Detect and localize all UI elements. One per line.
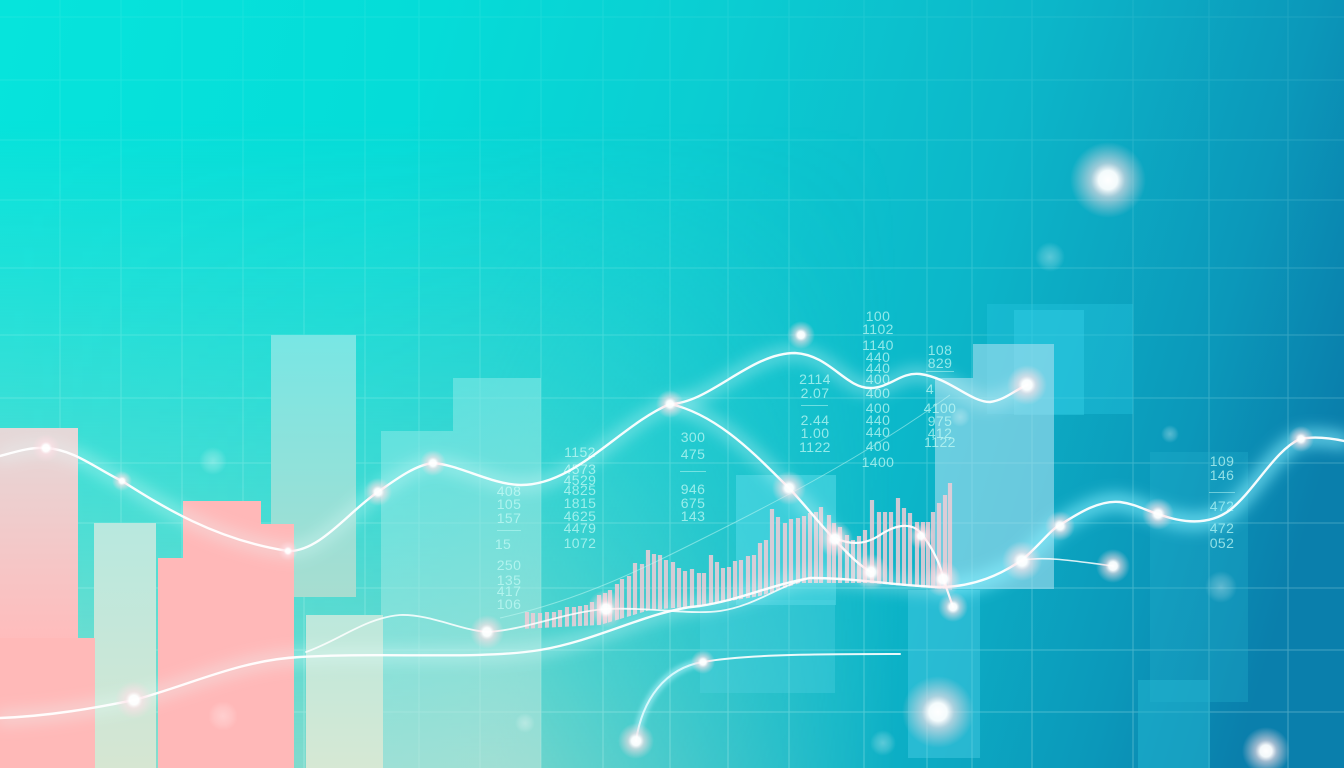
bar: blue bottom right bbox=[1138, 680, 1210, 768]
numbers column 1: 250 bbox=[497, 557, 521, 573]
thin diagonal trend line bbox=[500, 395, 950, 618]
numbers column 6 bbox=[924, 342, 956, 450]
bar: pink stepped centre bbox=[158, 501, 294, 768]
numbers column 5: 1400 bbox=[862, 454, 894, 470]
numbers column 6: 4 bbox=[926, 381, 934, 397]
node: descending two bbox=[817, 521, 853, 557]
numbers column 7: 146 bbox=[1210, 467, 1234, 483]
bar: blue top right inner bbox=[1014, 310, 1084, 415]
numbers column 7 bbox=[1209, 453, 1235, 551]
chart: small pink bar series bbox=[527, 483, 950, 640]
node: short branch end bbox=[1096, 549, 1130, 583]
node: right fork bbox=[1002, 541, 1042, 581]
soft background orbs bbox=[199, 242, 1237, 756]
curve: bottom rising bbox=[636, 654, 900, 741]
node: upper wave second bbox=[112, 471, 132, 491]
numbers column 6: 108 bbox=[928, 342, 952, 358]
curve: wavy branch bbox=[835, 526, 953, 607]
numbers column 5: 400 bbox=[866, 400, 890, 416]
node: secondary wave dip bbox=[470, 615, 504, 649]
bar: wide pale stepped bbox=[381, 378, 541, 768]
curve: long lower wave bbox=[0, 438, 1344, 718]
numbers column 1: 408 bbox=[497, 483, 521, 499]
numbers column 1: 417 bbox=[497, 583, 521, 599]
numbers column 6: 975 bbox=[928, 413, 952, 429]
node: right wave dip bbox=[1142, 498, 1174, 530]
node: right crest bbox=[1288, 426, 1314, 452]
bar: pink base left bbox=[0, 638, 95, 768]
bar: blue centre lower bbox=[700, 600, 835, 693]
large flare bottom bbox=[902, 676, 974, 748]
curve: bottom rising glow bbox=[636, 662, 703, 741]
curve: descending branch bbox=[670, 404, 871, 572]
node: bottom curve start bbox=[618, 723, 654, 759]
node: upper wave crest bbox=[420, 450, 446, 476]
node: secondary wave mid bbox=[587, 590, 625, 628]
numbers column 6: 412 bbox=[928, 425, 952, 441]
numbers column 2: 1815 bbox=[564, 495, 596, 511]
node: upper wave rise bbox=[364, 478, 392, 506]
numbers column 2: 4573 bbox=[564, 461, 596, 477]
numbers column 5: 400 bbox=[866, 438, 890, 454]
node: detached top bbox=[787, 321, 815, 349]
numbers column 2 bbox=[564, 444, 596, 551]
bar: blue centre upper bbox=[736, 475, 836, 605]
numbers column 4: 1.00 bbox=[801, 425, 829, 441]
curve glow halo bbox=[0, 353, 1344, 718]
node: descending one bbox=[772, 471, 806, 505]
numbers column 1 bbox=[495, 483, 521, 612]
panel: translucent background bars bbox=[0, 304, 1248, 768]
node: central junction bbox=[656, 390, 684, 418]
numbers column 5: 440 bbox=[866, 360, 890, 376]
curve: secondary lower wave bbox=[306, 578, 810, 652]
curve: upper wave bbox=[0, 353, 1027, 551]
numbers column 5: 100 bbox=[866, 308, 890, 324]
node: upper wave end bbox=[1007, 365, 1047, 405]
numbers column 7: 472 bbox=[1210, 498, 1234, 514]
numbers column 5: 1102 bbox=[862, 321, 894, 337]
numbers column 3: 475 bbox=[681, 446, 705, 462]
glow nodes bbox=[32, 142, 1314, 768]
numbers column 2: 4479 bbox=[564, 520, 596, 536]
numbers column 2: 1152 bbox=[564, 444, 596, 460]
numeric labels bbox=[495, 308, 1235, 612]
numbers column 3: 300 bbox=[681, 429, 705, 445]
numbers column 2: 4529 bbox=[564, 472, 596, 488]
node: lower wave left bbox=[115, 681, 153, 719]
bar: pale cyan tall bbox=[271, 335, 356, 597]
numbers column 1: 135 bbox=[497, 572, 521, 588]
node: right rise bbox=[1045, 511, 1075, 541]
numbers column 5: 440 bbox=[866, 424, 890, 440]
numbers column 3: 946 bbox=[681, 481, 705, 497]
node: bottom curve upper bbox=[691, 650, 715, 674]
bar: pink tall left bbox=[0, 428, 78, 640]
bar: pale lower bbox=[306, 615, 383, 768]
curve: short right branch bbox=[1022, 559, 1113, 566]
numbers column 5 bbox=[862, 308, 894, 470]
node: wavy branch bbox=[908, 523, 934, 549]
node: lower crossing bbox=[925, 561, 961, 597]
bar: light blue stepped bbox=[935, 344, 1054, 589]
numbers column 3 bbox=[680, 429, 706, 524]
flare bottom right bbox=[1242, 727, 1290, 768]
numbers column 6: 4100 bbox=[924, 400, 956, 416]
numbers column 5: 400 bbox=[866, 371, 890, 387]
numbers column 7: 052 bbox=[1210, 535, 1234, 551]
numbers column 5: 400 bbox=[866, 385, 890, 401]
bar: blue bottom centre bbox=[908, 590, 980, 758]
numbers column 6: 1122 bbox=[924, 434, 956, 450]
numbers column 4 bbox=[799, 371, 831, 455]
numbers column 4: 1122 bbox=[799, 439, 831, 455]
bar: pale green narrow bbox=[94, 523, 156, 768]
numbers column 1: 106 bbox=[497, 596, 521, 612]
numbers column 2: 4825 bbox=[564, 482, 596, 498]
numbers column 2: 4625 bbox=[564, 508, 596, 524]
numbers column 4: 2.44 bbox=[801, 412, 829, 428]
glowing curves bbox=[0, 353, 1344, 741]
node: branch end bbox=[938, 592, 968, 622]
numbers column 3: 143 bbox=[681, 508, 705, 524]
numbers column 1: 105 bbox=[497, 496, 521, 512]
numbers column 6: 829 bbox=[928, 355, 952, 371]
large flare top right bbox=[1070, 142, 1146, 218]
numbers column 7: 109 bbox=[1210, 453, 1234, 469]
node: descending three bbox=[853, 554, 889, 590]
numbers column 2: 1072 bbox=[564, 535, 596, 551]
node: upper wave trough bbox=[278, 541, 298, 561]
numbers column 5: 440 bbox=[866, 349, 890, 365]
numbers column 7: 472 bbox=[1210, 520, 1234, 536]
numbers column 5: 440 bbox=[866, 412, 890, 428]
bar: dark blue right bbox=[1150, 452, 1248, 702]
node: upper wave start bbox=[32, 434, 60, 462]
numbers column 1: 157 bbox=[497, 510, 521, 526]
numbers column 1: 15 bbox=[495, 536, 511, 552]
numbers column 3: 675 bbox=[681, 495, 705, 511]
numbers column 5: 1140 bbox=[862, 337, 894, 353]
numbers column 4: 2114 bbox=[799, 371, 831, 387]
numbers column 4: 2.07 bbox=[801, 385, 829, 401]
bar: blue top right back bbox=[987, 304, 1133, 414]
